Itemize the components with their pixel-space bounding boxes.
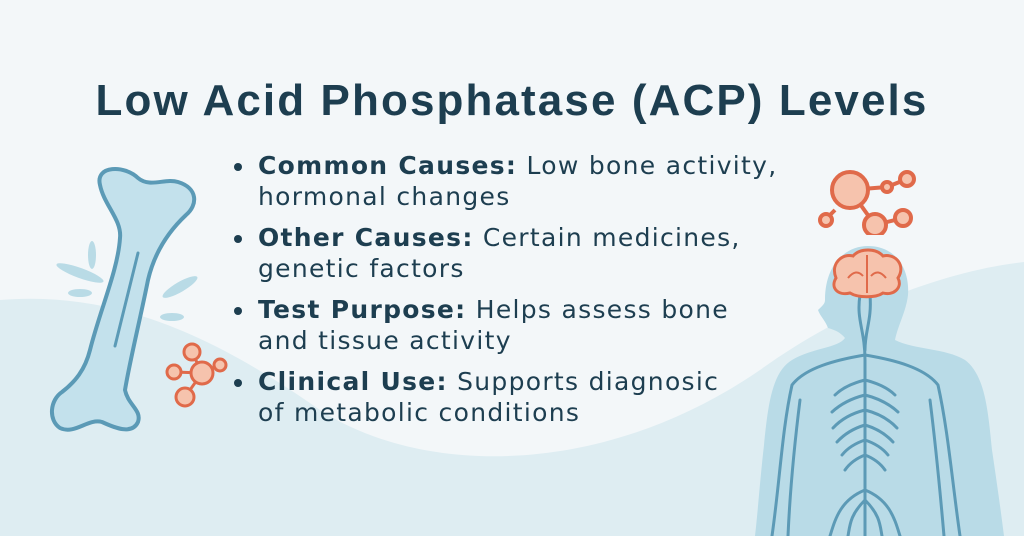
icon: molecule top right xyxy=(818,170,916,235)
bullet: other causes: genetic factors xyxy=(258,254,465,283)
bullet: test purpose: and tissue activity xyxy=(258,326,512,355)
icon: small molecule xyxy=(166,342,228,408)
bullet list xyxy=(234,151,778,427)
icon: bone xyxy=(50,167,198,432)
bullet: other causes xyxy=(232,222,832,284)
bullet: common causes: Common Causes: Low bone activity, xyxy=(258,151,778,180)
icon: brain xyxy=(834,250,901,297)
bullet: common causes xyxy=(232,150,832,212)
bullet: common causes: hormonal changes xyxy=(258,182,511,211)
bullet: test purpose: Test Purpose: Helps assess bone xyxy=(258,295,729,324)
human figure with nervous system xyxy=(755,246,1004,536)
bullet: clinical use xyxy=(232,366,832,428)
bullet: other causes: Other Causes: Certain medicines, xyxy=(258,223,741,252)
bullet: test purpose xyxy=(232,294,832,356)
title: Low Acid Phosphatase (ACP) Levels xyxy=(96,76,928,125)
bullet: clinical use: Clinical Use: Supports diagnosic xyxy=(258,367,719,396)
bullet: clinical use: of metabolic conditions xyxy=(258,398,580,427)
